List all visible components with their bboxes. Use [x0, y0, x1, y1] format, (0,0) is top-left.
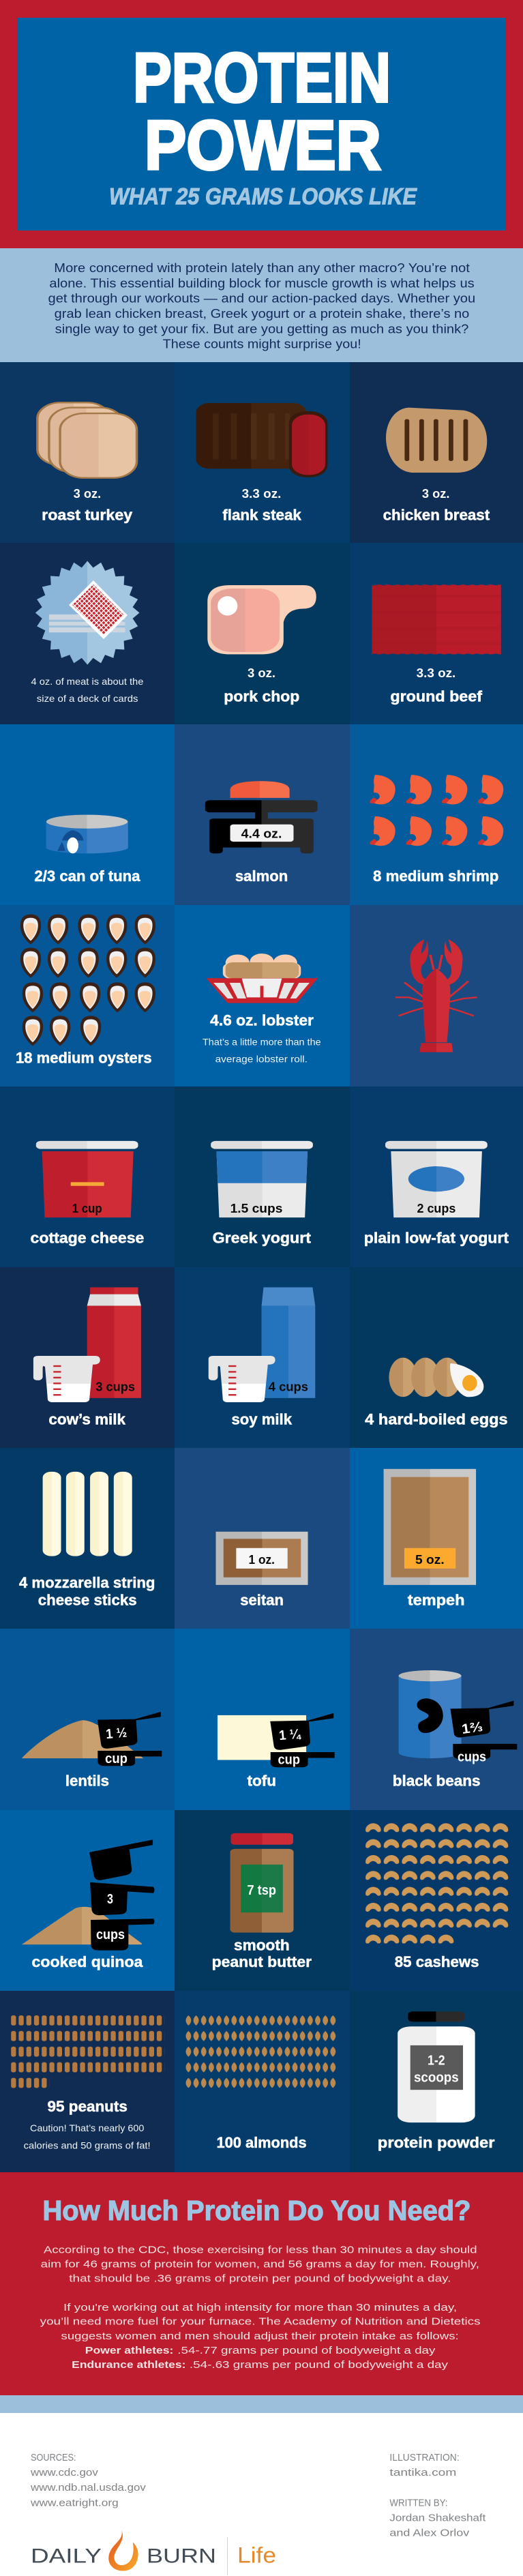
panel: chicken breast	[350, 362, 523, 543]
panel: lobster	[350, 905, 523, 1086]
label: salmon	[235, 868, 288, 885]
label: peanut butter	[212, 1953, 312, 1970]
panel: intro text: More concerned with protein lately than any other macro? You’re not	[54, 261, 470, 275]
icon: pork chop	[207, 585, 316, 654]
panel: lentils	[0, 1629, 175, 1810]
sources: SOURCES:	[31, 2452, 76, 2463]
paragraph: athletes: .54-.77 grams per pound of bodyweight a day	[177, 2345, 436, 2356]
paragraph: CDC guidance	[41, 2244, 479, 2285]
panel: protein powder	[350, 1991, 523, 2172]
sources: www.eatright.org	[30, 2497, 119, 2508]
panel: oysters	[0, 905, 175, 1086]
credits: tantika.com	[389, 2467, 456, 2478]
sources	[30, 2452, 146, 2508]
scale reading: 4.4 oz.	[241, 827, 282, 840]
label: 95 peanuts	[48, 2098, 128, 2115]
panel: black beans	[350, 1629, 523, 1810]
icon: 8 shrimp	[370, 775, 503, 846]
icon: lobster	[395, 939, 477, 1052]
scoop text: 3	[107, 1892, 113, 1907]
paragraph: athletes: .54-.63 grams per pound of bodyweight a day	[190, 2359, 449, 2371]
panel: lobster roll	[175, 905, 350, 1086]
icon: milk carton and cup	[33, 1288, 141, 1402]
amount: 1 oz.	[248, 1553, 275, 1567]
panel: Greek yogurt	[175, 1086, 350, 1267]
paragraph: athletes	[40, 2302, 480, 2371]
panel: shrimp	[350, 724, 523, 905]
label: flank steak	[222, 507, 302, 524]
amount: 4 cups	[269, 1380, 308, 1394]
panel: roast turkey	[0, 362, 175, 543]
label: 2/3 can of tuna	[34, 868, 140, 885]
icon: soy carton and cup	[209, 1288, 315, 1402]
title	[133, 39, 391, 184]
label: seitan	[240, 1591, 284, 1608]
icon: tofu and scoops	[218, 1713, 335, 1767]
amount: 2 cups	[417, 1202, 455, 1215]
label: soy milk	[232, 1410, 293, 1427]
scoop text: cup	[105, 1751, 128, 1766]
icon: almonds	[185, 2015, 338, 2088]
credits: ILLUSTRATION:	[389, 2452, 460, 2463]
paragraph: athletes: suggests women and men should adjust their protein intake as follows:	[61, 2330, 459, 2342]
icon: salmon on scale	[205, 781, 318, 853]
scoop text: cup	[278, 1753, 300, 1768]
amount: scoops	[414, 2070, 459, 2085]
paragraph: athletes: Endurance athletes:	[72, 2359, 185, 2371]
panel: seitan	[175, 1448, 350, 1629]
icon: lentils and scoops	[22, 1712, 162, 1766]
paragraph: athletes: Power athletes:	[85, 2345, 173, 2356]
paragraph: CDC guidance: According to the CDC, those exercising for less than 30 minutes a day should	[44, 2244, 477, 2255]
amount: 3.3 oz.	[417, 666, 455, 680]
title: POWER	[145, 106, 381, 184]
icon: chicken breast	[386, 408, 487, 473]
icon: Greek yogurt tub	[211, 1141, 313, 1217]
panel: almonds	[175, 1991, 350, 2172]
scoop text: 1⅔	[460, 1719, 483, 1737]
panel: soy milk	[175, 1267, 350, 1448]
credits: Jordan Shakeshaft	[389, 2512, 486, 2523]
band: light blue divider	[0, 2395, 523, 2413]
amount: 5 oz.	[415, 1553, 445, 1567]
amount: 7 tsp	[247, 1883, 276, 1898]
paragraph: athletes: you’ll need more fuel for your furnace. The Academy of Nutrition and Dietetics	[40, 2316, 480, 2327]
amount: 3.3 oz.	[242, 487, 281, 501]
label: plain low-fat yogurt	[364, 1230, 509, 1247]
label: Greek yogurt	[213, 1230, 312, 1247]
icon: lobster roll basket	[206, 953, 318, 1003]
label: 18 medium oysters	[16, 1049, 152, 1066]
scoop text: cups	[458, 1750, 486, 1765]
icon: cottage cheese tub	[36, 1141, 138, 1217]
title: PROTEIN	[133, 39, 391, 117]
label: 8 medium shrimp	[373, 868, 498, 885]
icon: deck of cards	[69, 580, 128, 639]
caption: size of a deck of cards	[37, 693, 138, 704]
icon: tuna can	[46, 815, 128, 853]
label: smooth	[234, 1937, 290, 1954]
icon: seitan pack	[216, 1532, 308, 1585]
label: chicken breast	[383, 507, 490, 524]
scoop text: cups	[96, 1927, 125, 1942]
note: That’s a little more than the	[203, 1037, 321, 1048]
panel: plain yogurt	[350, 1086, 523, 1267]
panel: header	[0, 0, 523, 248]
label: lentils	[65, 1772, 109, 1789]
icon: quinoa and scoops	[22, 1839, 154, 1951]
icon: ground beef	[372, 584, 501, 654]
panel: peanut butter	[175, 1810, 350, 1991]
icon: protein powder tub	[398, 2011, 475, 2122]
panel: cow's milk	[0, 1267, 175, 1448]
icon: bean can and scoops	[399, 1670, 517, 1759]
label: protein powder	[378, 2134, 495, 2151]
icon: badge	[35, 561, 139, 665]
label: roast turkey	[42, 507, 133, 524]
panel: intro text: These counts might surprise you!	[163, 338, 361, 351]
panel: cooked quinoa	[0, 1810, 175, 1991]
panel: salmon	[175, 724, 350, 905]
scoop text: 1 ¼	[278, 1726, 302, 1743]
label: cow’s milk	[48, 1410, 126, 1427]
icon: plain yogurt tub	[385, 1141, 488, 1217]
label: 4.6 oz. lobster	[210, 1012, 314, 1028]
panel: tempeh	[350, 1448, 523, 1629]
panel: intro text: grab lean chicken breast, Greek yogurt or a protein shake, there’s no	[55, 307, 469, 321]
subtitle: WHAT 25 GRAMS LOOKS LIKE	[109, 184, 417, 210]
panel: pork chop	[175, 543, 350, 724]
label: pork chop	[224, 687, 299, 705]
note: calories and 50 grams of fat!	[24, 2140, 151, 2150]
paragraph: CDC guidance: aim for 46 grams of protein for women, and 56 grams a day for men. Roughly,	[41, 2259, 479, 2270]
panel: tofu	[175, 1629, 350, 1810]
icon: eggs	[389, 1358, 483, 1397]
label: cottage cheese	[30, 1230, 144, 1247]
panel: tuna	[0, 724, 175, 905]
panel: how much protein	[0, 2172, 523, 2395]
sources: www.cdc.gov	[30, 2467, 98, 2478]
label: cooked quinoa	[31, 1953, 143, 1970]
credits: and Alex Orlov	[389, 2528, 470, 2538]
icon: peanuts	[11, 2015, 164, 2088]
label: 85 cashews	[395, 1953, 479, 1970]
label: tempeh	[408, 1591, 465, 1608]
label: 4 hard-boiled eggs	[365, 1410, 508, 1427]
amount: 3 cups	[95, 1380, 135, 1394]
icon: 18 oysters	[20, 915, 155, 1046]
label: cheese sticks	[38, 1591, 137, 1608]
logo: Daily Burn Life: BURN	[147, 2545, 216, 2567]
amount: 1.5 cups	[230, 1202, 282, 1215]
credits: WRITTEN BY:	[389, 2497, 447, 2508]
amount: 3 oz.	[248, 666, 275, 680]
panel: cottage cheese	[0, 1086, 175, 1267]
label: 100 almonds	[217, 2134, 307, 2151]
amount: 1 cup	[72, 1202, 102, 1215]
icon: peanut butter jar	[230, 1833, 293, 1933]
label: black beans	[393, 1772, 480, 1789]
sources: www.ndb.nal.usda.gov	[30, 2482, 146, 2493]
paragraph: athletes: If you're working out at high intensity for more than 30 minutes a day,	[63, 2302, 457, 2313]
amount: 1-2	[428, 2053, 445, 2068]
panel: intro text	[0, 248, 523, 362]
panel: deck of cards comparison	[0, 543, 175, 724]
note: Caution! That’s nearly 600	[30, 2122, 145, 2133]
icon: flame	[108, 2530, 138, 2571]
caption: 4 oz. of meat is about the	[31, 676, 144, 687]
panel: ground beef	[350, 543, 523, 724]
icon: turkey slices	[38, 402, 137, 478]
scoop text: 1 ½	[105, 1726, 128, 1742]
icon: tempeh pack	[384, 1469, 476, 1585]
label: ground beef	[390, 687, 483, 705]
panel: intro text: alone. This essential building block for muscle growth is what helps us	[49, 276, 475, 290]
note: average lobster roll.	[215, 1054, 308, 1065]
logo: Daily Burn Life: Life	[237, 2543, 276, 2567]
logo: Daily Burn Life: DAILY	[31, 2545, 102, 2567]
heading: How Much Protein Do You Need?	[42, 2195, 470, 2226]
panel: cashews	[350, 1810, 523, 1991]
panel: mozzarella sticks	[0, 1448, 175, 1629]
panel: intro text: get through our workouts — and our action-packed days. Whether you	[48, 292, 475, 306]
paragraph: CDC guidance: that should be .36 grams of protein per pound of bodyweight a day.	[69, 2273, 451, 2285]
icon: steak	[196, 403, 327, 477]
label: 4 mozzarella string	[19, 1574, 155, 1591]
amount: 3 oz.	[422, 487, 450, 501]
panel: intro text: single way to get your fix. But are you getting as much as you think?	[55, 322, 468, 336]
panel: flank steak	[175, 362, 350, 543]
amount: 3 oz.	[74, 487, 101, 501]
icon: string cheese sticks	[43, 1472, 132, 1556]
panel: peanuts	[0, 1991, 175, 2172]
panel: hard-boiled eggs	[350, 1267, 523, 1448]
logo: Daily Burn Life	[31, 2530, 276, 2575]
credits	[389, 2452, 486, 2538]
label: tofu	[247, 1772, 276, 1789]
icon: cashews	[365, 1822, 511, 1944]
